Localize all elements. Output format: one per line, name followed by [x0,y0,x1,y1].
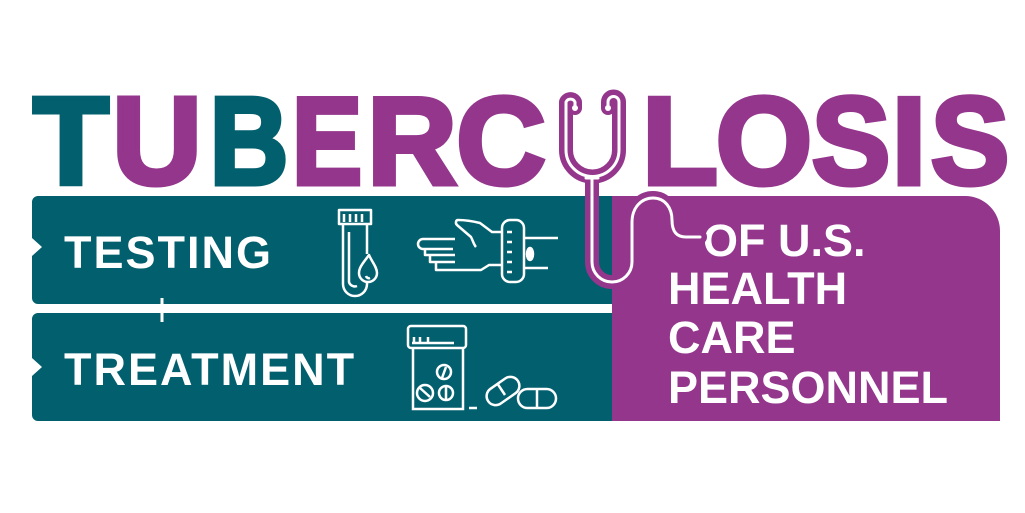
text: of u.s. health care personnel: HEALTH [668,263,847,314]
text: of u.s. health care personnel: OF U.S. [703,215,866,266]
title: O [716,73,812,211]
panel: teal treatment [32,313,615,421]
text: of u.s. health care personnel [668,215,948,413]
text: of u.s. health care personnel: CARE [668,312,796,363]
divider with plus [35,298,560,322]
title: U [112,73,202,211]
title: I [892,73,926,211]
icon: stethoscope as U [566,97,700,282]
icon: pill bottle and capsules [408,326,556,409]
text: of u.s. health care personnel: PERSONNEL [668,362,948,413]
title: C [456,73,546,211]
title: L [642,73,718,211]
icon: test tube [339,210,377,296]
icon: arm with skin test band [418,220,558,282]
title: B [210,71,288,211]
heading: testing: TESTING [64,227,273,278]
panel: teal testing [32,196,615,304]
panel: purple health care personnel [612,196,1000,421]
heading: treatment: TREATMENT [64,344,356,395]
title: E [292,73,362,211]
title: R [367,73,457,211]
title: S [812,72,890,211]
title: S [931,72,1009,211]
title: T [33,73,109,211]
title [33,71,1009,211]
